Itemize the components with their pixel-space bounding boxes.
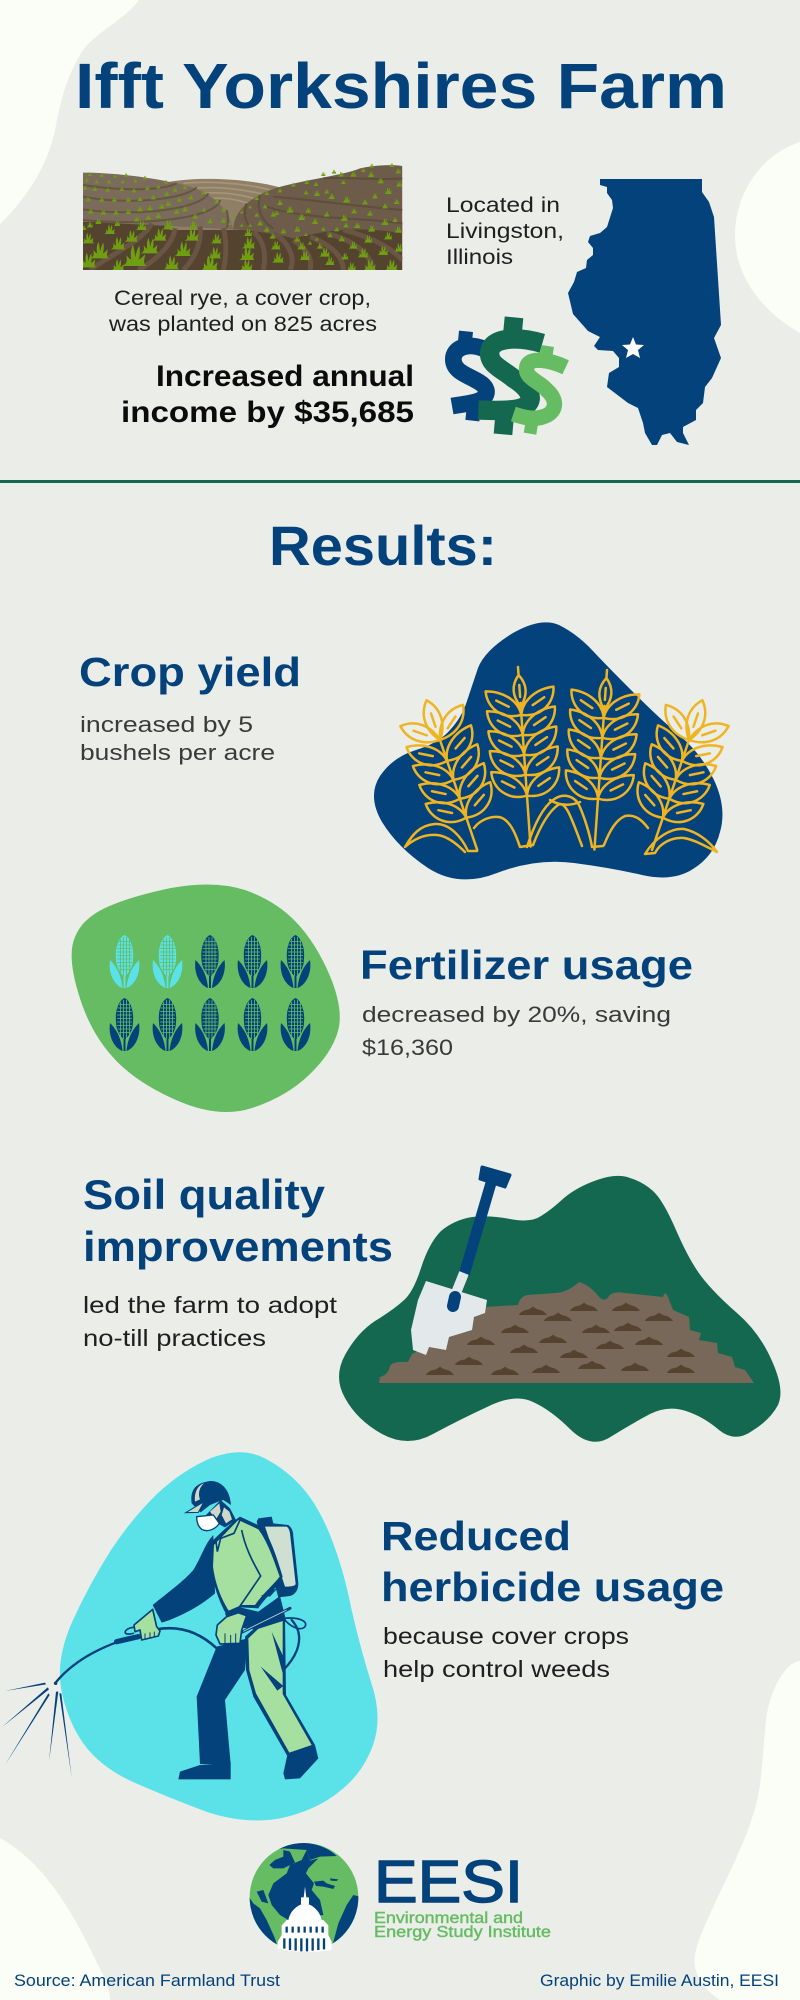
- text: location: Located in: [446, 193, 560, 217]
- text: herbicide detail: help control weeds: [383, 1656, 610, 1682]
- icon: globe with capitol: [247, 1843, 360, 1952]
- title: Ifft Yorkshires Farm: [75, 50, 727, 122]
- text: fertilizer detail: [362, 1002, 671, 1060]
- blob: dark green: [339, 1176, 780, 1442]
- neck and face: [206, 1500, 236, 1527]
- heading: reduced herbicide usage: Reduced: [381, 1513, 571, 1559]
- waist: [225, 1596, 286, 1629]
- text: cover crop caption: was planted on 825 acres: [108, 313, 377, 336]
- map: Illinois with location star: [568, 179, 721, 445]
- background blob: top left: [0, 0, 139, 224]
- logo subtitle: Environmental and: [374, 1910, 523, 1927]
- heading: fertilizer usage: Fertilizer usage: [360, 942, 693, 988]
- text: cover crop caption: Cereal rye, a cover crop,: [114, 287, 371, 310]
- heading: reduced herbicide usage: herbicide usage: [381, 1564, 724, 1610]
- text: location: Livingston,: [446, 219, 564, 243]
- text: income increase: [121, 360, 414, 429]
- text: crop yield detail: increased by 5: [80, 712, 253, 737]
- text: fertilizer detail: decreased by 20%, saving: [362, 1002, 671, 1027]
- illustration: worker spraying herbicide: [2, 1481, 318, 1779]
- text: location: [446, 193, 564, 269]
- boots: [178, 1763, 231, 1779]
- text: fertilizer detail: $16,360: [362, 1035, 453, 1060]
- heading: crop yield: Crop yield: [79, 649, 301, 695]
- text: income increase: Increased annual: [156, 360, 414, 393]
- spray lines: [2, 1682, 72, 1777]
- blob: cyan: [60, 1452, 378, 1820]
- logo wordmark: EESI: [374, 1849, 523, 1915]
- gloves: [134, 1609, 160, 1640]
- text: income increase: income by $35,685: [121, 396, 414, 429]
- panel: reduced herbicide usage: [2, 1452, 724, 1820]
- icon: star: [622, 337, 644, 358]
- text: soil detail: [83, 1292, 338, 1351]
- panel: fertilizer usage: [72, 884, 693, 1112]
- dark sleeve: [153, 1535, 215, 1623]
- graphic credit: Graphic by Emilie Austin, EESI: [540, 1972, 779, 1990]
- shirt: [211, 1517, 283, 1615]
- heading: soil quality improvements: [83, 1171, 393, 1270]
- icon: wheat stalks: [390, 665, 739, 862]
- background blob: bottom left: [0, 1838, 110, 2000]
- text: herbicide detail: because cover crops: [383, 1623, 629, 1649]
- panel: farm overview: [79, 163, 721, 445]
- illustration: soil pile: [379, 1282, 754, 1383]
- heading: reduced herbicide usage: [381, 1513, 724, 1610]
- background blob: bottom right: [695, 1661, 800, 2000]
- panel: crop yield: [79, 622, 739, 879]
- green trousers: [245, 1617, 315, 1756]
- background blob: top right: [735, 142, 800, 333]
- shirt details: [216, 1520, 261, 1610]
- mask: [197, 1515, 219, 1531]
- heading: Results: Results:: [269, 514, 497, 577]
- source credit: Source: American Farmland Trust: [14, 1972, 280, 1990]
- heading: soil quality improvements: Soil quality: [83, 1171, 326, 1218]
- panel: EESI logo: [247, 1843, 551, 1952]
- hose and wand: [55, 1618, 306, 1683]
- icon: dollar signs: [452, 317, 566, 434]
- sprayer tank: [257, 1517, 298, 1597]
- logo subtitle: [374, 1910, 551, 1941]
- text: crop yield detail: bushels per acre: [80, 740, 275, 765]
- panel: soil quality: [83, 1167, 780, 1442]
- text: soil detail: no-till practices: [83, 1325, 266, 1351]
- text: herbicide detail: [383, 1623, 629, 1682]
- cap: [191, 1481, 231, 1512]
- text: cover crop caption: [108, 287, 377, 336]
- heading: soil quality improvements: improvements: [83, 1223, 393, 1270]
- icon: corn grid: [110, 935, 310, 1051]
- text: soil detail: led the farm to adopt: [83, 1292, 338, 1318]
- divider line: [0, 480, 800, 483]
- illustration: cover crop field: [79, 163, 404, 271]
- text: location: Illinois: [446, 245, 513, 269]
- text: crop yield detail: [80, 712, 275, 765]
- blob: green: [72, 884, 340, 1112]
- blob: navy: [374, 622, 722, 879]
- dark trousers: [197, 1638, 247, 1764]
- logo subtitle: Energy Study Institute: [374, 1924, 551, 1941]
- spray handle: [242, 1608, 290, 1632]
- icon: shovel: [411, 1167, 510, 1355]
